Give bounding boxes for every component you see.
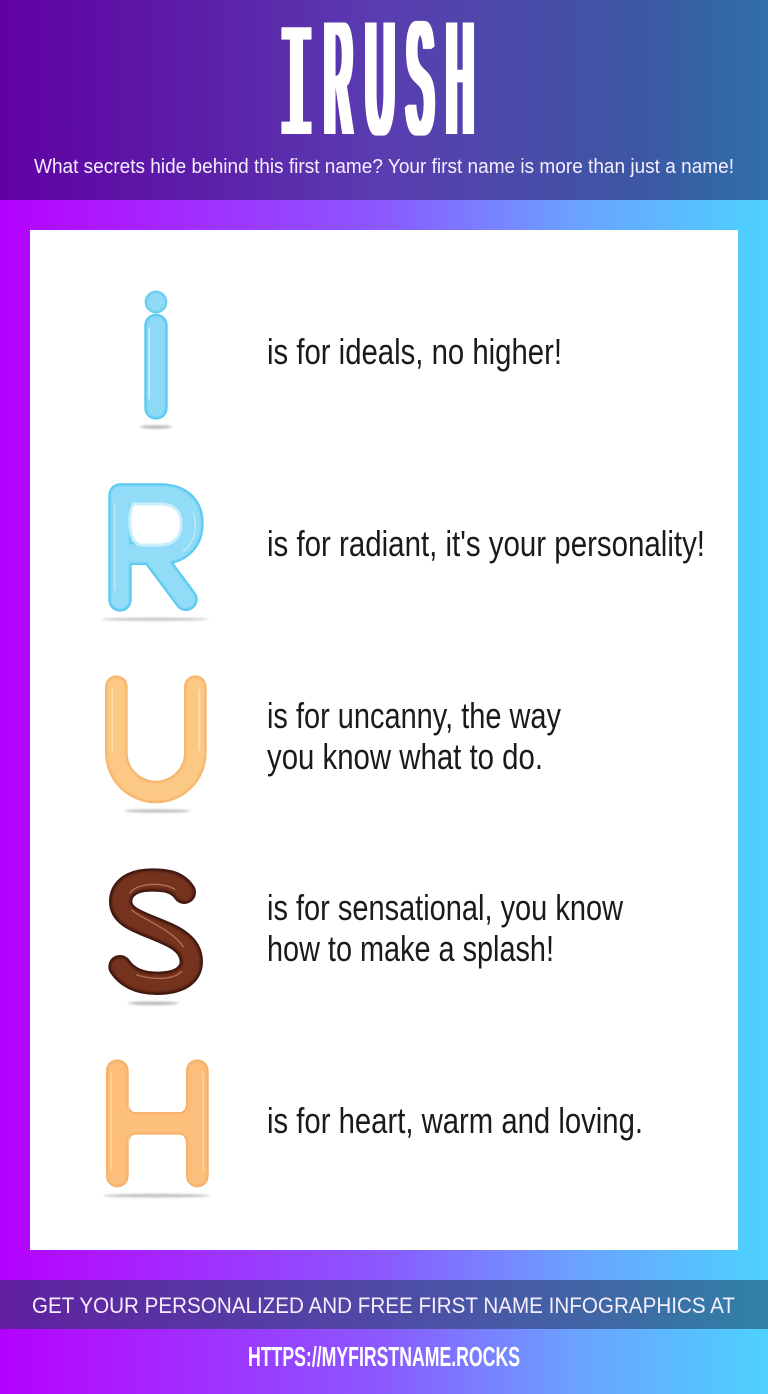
icon: letter I: [140, 291, 172, 429]
body text: U: is for uncanny, the way: [267, 695, 561, 736]
body text: S: how to make a splash!: [267, 928, 554, 969]
footer band: [0, 1280, 768, 1329]
header band: [0, 0, 768, 200]
title: I: [280, 0, 313, 183]
title: [280, 0, 473, 183]
body text: H: is for heart, warm and loving.: [267, 1100, 643, 1141]
icon: letter H: [103, 1071, 210, 1197]
body text: I: is for ideals, no higher!: [267, 331, 562, 372]
body text: U: you know what to do.: [267, 736, 543, 777]
icon: letter S: [120, 880, 191, 1005]
body text: S: is for sensational, you know: [267, 887, 624, 928]
footer url: HTTPS://MYFIRSTNAME.ROCKS: [248, 1341, 520, 1372]
body text: S: [267, 887, 624, 969]
icon: letter U: [112, 687, 199, 813]
footer call to action: GET YOUR PERSONALIZED AND FREE FIRST NAME INFOGRAPHICS AT: [32, 1293, 735, 1318]
body text: U: [267, 695, 561, 777]
icon: letter R: [102, 495, 208, 621]
subtitle: What secrets hide behind this first name? Your first name is more than just a name!: [34, 156, 734, 178]
white content panel: [30, 230, 738, 1250]
